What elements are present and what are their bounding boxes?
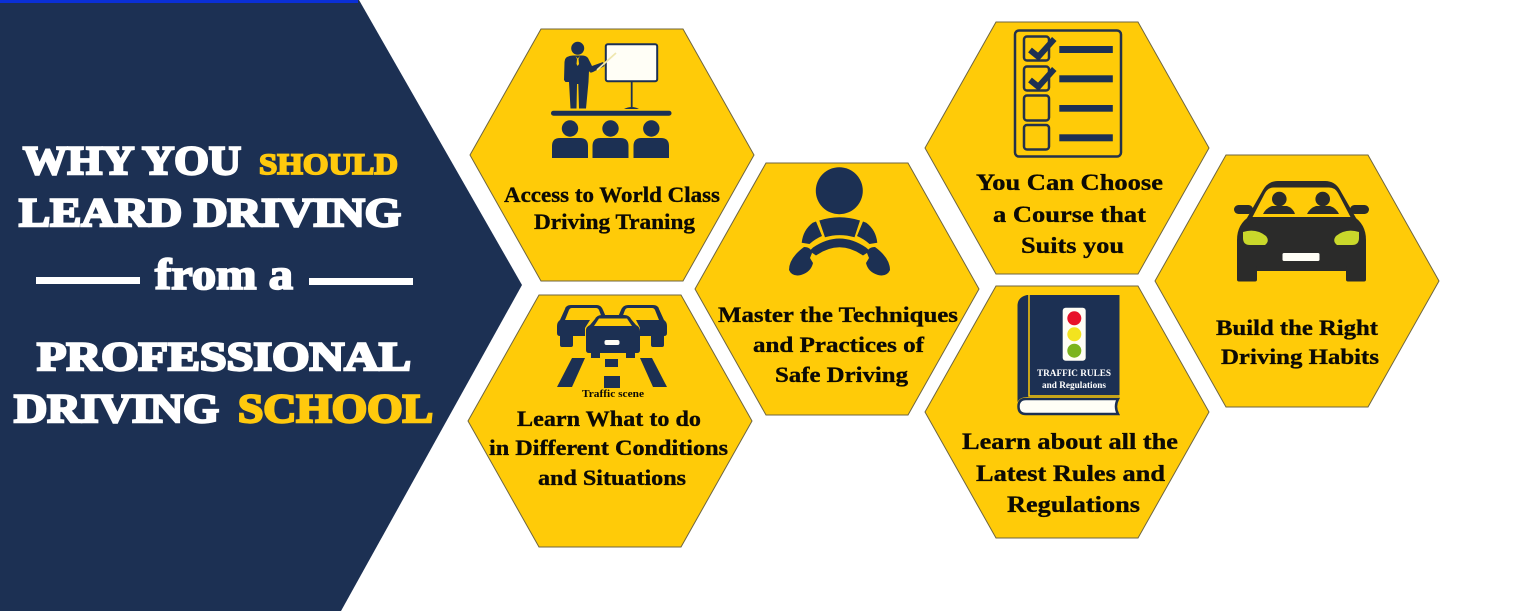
text: habits label: Driving Habits: [1221, 344, 1379, 369]
text: conditions label: Learn What to do: [517, 406, 701, 431]
text: techniques label: Master the Techniques: [718, 302, 958, 327]
icon: car with two occupants: [1234, 181, 1369, 282]
title: [14, 138, 433, 431]
icon: driver at steering wheel: [789, 167, 890, 275]
title: PROFESSIONAL: [37, 334, 411, 379]
title: from a: [155, 252, 293, 299]
text: techniques label: and Practices of: [753, 332, 925, 357]
text: access label: [504, 182, 720, 234]
title: WHY YOU: [23, 138, 241, 183]
panel: safe driving techniques: [695, 163, 979, 415]
icon: checklist: [1015, 30, 1121, 156]
icon: traffic scene: Traffic scene: [582, 389, 644, 400]
panel: access to world class training: [470, 29, 754, 281]
icon: traffic rules book: and Regulations: [1042, 381, 1106, 391]
text: access label: Driving Traning: [534, 209, 696, 234]
icon: traffic rules book: TRAFFIC RULES: [1037, 369, 1111, 379]
text: conditions label: and Situations: [538, 465, 686, 490]
panel: different conditions: [468, 295, 752, 547]
title: LEARD DRIVING: [19, 190, 401, 235]
text: course label: Suits you: [1021, 233, 1124, 259]
title: SCHOOL: [238, 386, 433, 431]
icon: instructor and audience: [551, 42, 672, 158]
text: rules label: Latest Rules and: [976, 461, 1165, 487]
panel: navy chevron: [0, 0, 522, 611]
text: conditions label: in Different Conditions: [489, 435, 728, 460]
text: techniques label: Safe Driving: [775, 362, 909, 387]
icon: traffic scene: [557, 305, 667, 400]
icon: traffic rules book: [1018, 295, 1120, 414]
text: rules label: Learn about all the: [962, 429, 1178, 455]
text: course label: You Can Choose: [976, 170, 1163, 196]
text: course label: a Course that: [993, 202, 1146, 228]
text: habits label: Build the Right: [1216, 315, 1379, 340]
top blue bar: [0, 0, 358, 3]
text: rules label: Regulations: [1007, 492, 1140, 518]
text: habits label: [1216, 315, 1379, 369]
panel: choose a course: [925, 22, 1209, 274]
text: access label: Access to World Class: [504, 182, 720, 207]
title: SHOULD: [259, 148, 398, 181]
text: techniques label: [718, 302, 958, 387]
panel: driving habits: [1155, 155, 1439, 407]
text: course label: [976, 170, 1163, 259]
title: DRIVING: [14, 386, 219, 431]
text: rules label: [962, 429, 1178, 518]
text: conditions label: [489, 406, 728, 490]
panel: rules and regulations: [925, 286, 1209, 538]
